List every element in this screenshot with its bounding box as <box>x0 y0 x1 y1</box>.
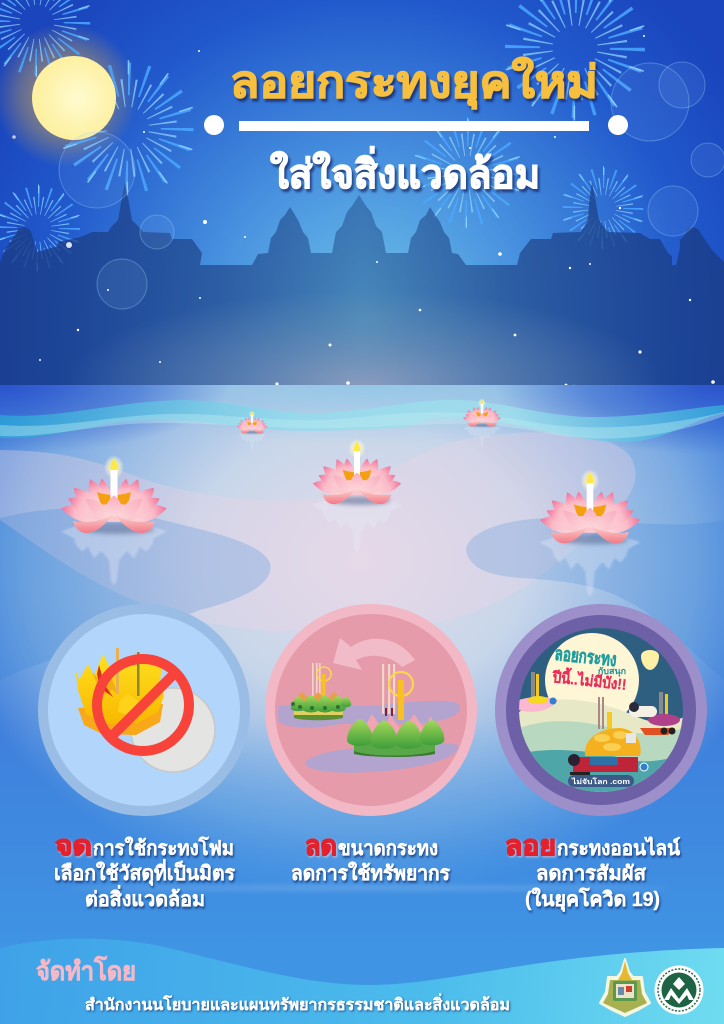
caption 2: ลด <box>305 830 337 861</box>
panel: no foam krathong <box>38 604 250 816</box>
panel: smaller krathong <box>265 604 477 816</box>
right krathong <box>629 692 680 735</box>
icon: large krathong <box>347 664 444 757</box>
icon: yellow krathong <box>75 648 164 735</box>
title line 2: ใส่ใจสิ่งแวดล้อม <box>270 146 540 197</box>
lotus: far right small <box>462 399 502 447</box>
lotus: left <box>60 455 168 586</box>
caption 3: กระทงออนไลน์ <box>557 836 680 860</box>
caption 1: การใช้กระทงโฟม <box>93 836 234 860</box>
caption 1: ต่อสิ่งแวดล้อม <box>85 884 205 911</box>
title divider <box>204 115 628 135</box>
poster headline: ลอยกระทง <box>554 644 618 671</box>
lotus: right <box>538 469 642 597</box>
moon <box>32 56 116 140</box>
credit organisation: สำนักงานนโยบายและแผนทรัพยากรธรรมชาติและสิ่งแวดล้อม <box>85 993 510 1014</box>
water background <box>0 385 724 894</box>
poster headline: กับสนุก <box>598 666 626 677</box>
wave band <box>0 400 724 442</box>
fireworks <box>0 0 640 267</box>
stars <box>12 35 715 387</box>
caption 3: (ในยุคโควิด 19) <box>525 887 660 912</box>
caption 2: ขนาดกระทง <box>338 838 438 860</box>
moon glow <box>0 23 138 167</box>
lotus: far left small <box>236 411 268 450</box>
logo: ministry emblem <box>600 959 650 1016</box>
caption 3 <box>505 830 680 912</box>
icon: small krathong <box>291 663 351 720</box>
purple water shapes <box>278 701 460 773</box>
caption 3: ลดการสัมผัส <box>536 863 647 885</box>
sky background <box>0 0 724 386</box>
caption 3: ลอย <box>505 830 556 861</box>
temple silhouette and dark band <box>0 182 724 385</box>
caption 1: จด <box>55 830 92 861</box>
caption 1: เลือกใช้วัสดุที่เป็นมิตร <box>54 858 235 886</box>
caption 1 <box>54 830 235 911</box>
panel: online krathong <box>495 604 707 816</box>
poster headline <box>551 644 628 694</box>
caption 2: ลดการใช้ทรัพยากร <box>291 861 450 885</box>
gold coin krathong <box>568 697 648 787</box>
lotus: centre <box>311 439 403 553</box>
horizon glow <box>96 306 634 385</box>
bokeh circles <box>59 62 724 309</box>
title line 1: ลอยกระทงยุคใหม่ <box>230 56 598 110</box>
caption 2 <box>291 830 450 885</box>
icon: foam disk <box>131 688 215 772</box>
water shapes <box>0 432 724 680</box>
icon: prohibited sign <box>97 659 189 751</box>
icon: curved arrow <box>333 638 415 670</box>
lantern <box>641 650 659 670</box>
footer wave <box>0 939 724 1024</box>
gold coin krathong: ไม่จับโลก .com <box>571 777 630 786</box>
poster headline: ปีนี้..ไม่มีบัง!! <box>551 665 628 694</box>
left krathong <box>519 672 558 712</box>
logo: ONEP circle <box>654 966 704 1014</box>
online krathong poster <box>519 628 683 792</box>
credit heading: จัดทำโดย <box>36 955 136 986</box>
